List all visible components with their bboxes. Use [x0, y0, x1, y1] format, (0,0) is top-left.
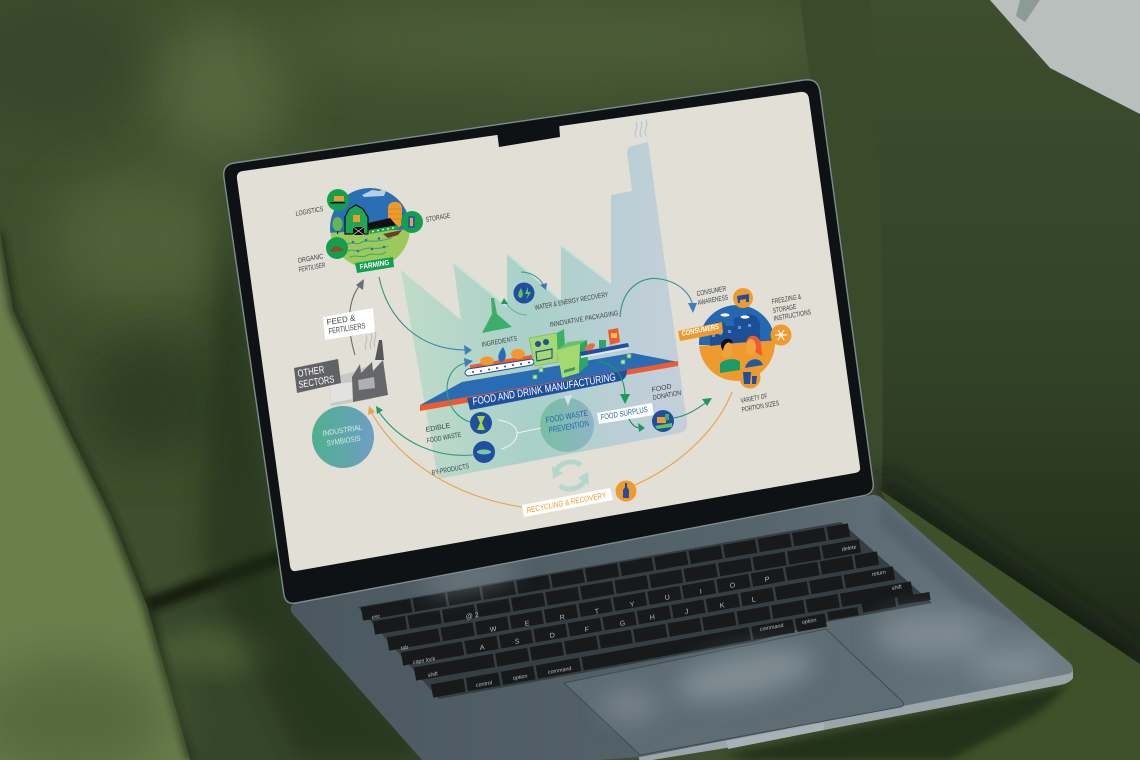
- key legends: esc: [372, 614, 381, 621]
- factory silhouette: [401, 120, 687, 478]
- consumers scene: [678, 288, 792, 388]
- laptop base: [291, 495, 1073, 760]
- chimney smoke: [635, 120, 647, 138]
- arrow: edible waste to ingredients: [447, 358, 473, 422]
- recycling icon: [552, 462, 589, 489]
- key legends: O: [730, 582, 736, 590]
- other sectors label: SECTORS: [298, 374, 335, 391]
- industrial symbiosis circle: SYMBIOSIS: [326, 434, 361, 448]
- key legends: U: [665, 594, 670, 602]
- consumer awareness label: CONSUMER: [696, 286, 727, 298]
- field waves: [347, 238, 392, 257]
- white connector arcs: [498, 420, 541, 449]
- logistics label: LOGISTICS: [295, 206, 324, 218]
- key legends: delete: [842, 544, 857, 553]
- icon: consumer awareness: [733, 288, 753, 308]
- arrow: factory to farming: [349, 279, 364, 355]
- food and drink manufacturing banner: FOOD AND DRINK MANUFACTURING: [472, 371, 616, 408]
- mud: [383, 230, 402, 238]
- cloud: [362, 190, 386, 197]
- key legends: tab: [401, 645, 409, 652]
- shed: [368, 218, 397, 231]
- edible food waste label: EDIBLE: [425, 422, 451, 434]
- feed and fertilisers label: FEED &: [326, 313, 356, 327]
- icon: bottle: [616, 480, 636, 502]
- key legends: shift: [428, 671, 439, 679]
- key legends: option: [802, 617, 817, 626]
- key legends: option: [513, 673, 528, 682]
- organic fertiliser label: FERTILISER: [298, 262, 326, 274]
- icon: logistics: [327, 189, 349, 211]
- arrow: farming to ingredients: [379, 277, 472, 355]
- icon: freezing: [770, 324, 792, 346]
- arrow: energy recovery: [501, 298, 527, 315]
- farming scene: [325, 184, 423, 275]
- icon: storage: [401, 211, 423, 233]
- sawtooth highlights: [453, 245, 611, 306]
- silo: [388, 202, 402, 228]
- woman: [745, 336, 763, 368]
- consumers label: CONSUMERS: [681, 322, 719, 338]
- industrial symbiosis circle: [312, 406, 374, 468]
- food waste prevention circle: PREVENTION: [548, 418, 589, 435]
- key legends: T: [595, 608, 600, 616]
- water and energy recovery label: WATER & ENERGY RECOVERY: [534, 291, 609, 312]
- base deck: [291, 495, 1073, 760]
- other sectors label: [294, 359, 341, 393]
- factory: other sectors: [329, 332, 388, 406]
- icon: food donation: [652, 410, 674, 432]
- barn: [345, 205, 368, 234]
- key legends: K: [720, 602, 725, 610]
- arrow: donation to consumers: [673, 398, 712, 418]
- farming label: FARMING: [359, 258, 390, 271]
- machine legs: [533, 354, 631, 379]
- edible food waste label: FOOD WASTE: [426, 432, 462, 445]
- light patches on deck: [419, 558, 1050, 721]
- icon: organic fertiliser: [326, 237, 348, 259]
- key legends: S: [515, 638, 520, 646]
- organic fertiliser label: ORGANIC: [297, 253, 324, 265]
- by-products label: BY-PRODUCTS: [431, 463, 470, 477]
- deck shadow: [882, 508, 1030, 628]
- arrow: surplus to donation: [629, 419, 645, 432]
- key legends: caps lock: [413, 656, 436, 666]
- machine one: [529, 329, 565, 366]
- freezing and storage label: INSTRUCTIONS: [773, 309, 812, 323]
- key legends: E: [525, 620, 530, 628]
- icon: portion sizes: [740, 368, 760, 388]
- food waste prevention circle: [540, 395, 594, 452]
- key legends: command: [760, 623, 784, 633]
- freezing and storage label: STORAGE: [772, 304, 797, 315]
- laptop shadow: [198, 222, 414, 760]
- food waste prevention circle: FOOD WASTE: [545, 408, 589, 425]
- arrow: by-products to symbiosis: [376, 406, 473, 455]
- key legends: A: [480, 644, 485, 652]
- key legends: P: [765, 576, 770, 584]
- trackpad: [564, 629, 904, 755]
- consumer awareness label: [696, 286, 729, 307]
- feed and fertilisers label: FERTILISERS: [328, 321, 366, 336]
- seat lower left: [158, 598, 288, 760]
- icon: edible food waste: [470, 412, 492, 434]
- key legends: Y: [630, 601, 635, 609]
- keyboard well: [358, 522, 932, 699]
- other sectors label: OTHER: [297, 365, 325, 380]
- camera notch: [498, 126, 560, 147]
- arrow: to food surplus: [598, 361, 630, 404]
- food donation label: FOOD: [651, 383, 672, 394]
- key legends: F: [585, 626, 590, 634]
- key legends: @ 2: [466, 612, 479, 621]
- key legends: shift: [892, 584, 903, 592]
- key legends: I: [700, 589, 702, 596]
- key legends: [372, 544, 903, 689]
- arrow: recycling to symbiosis: [368, 406, 522, 507]
- key legends: command: [548, 666, 572, 676]
- innovative packaging label: INNOVATIVE PACKAGING: [549, 310, 619, 329]
- key legends: L: [752, 596, 756, 604]
- arrow: water recovery: [521, 272, 547, 290]
- ingredients label: INGREDIENTS: [481, 335, 518, 349]
- arrow: consumers to recycling: [635, 392, 732, 485]
- recycling and recovery label: RECYCLING & RECOVERY: [526, 491, 607, 515]
- arrow: packaging to consumers: [620, 278, 697, 317]
- tree: [332, 217, 342, 234]
- base front edge: [638, 668, 1073, 760]
- variety of portion sizes label: PORTION SIZES: [741, 400, 780, 414]
- right wing of chair: [880, 201, 1140, 664]
- marble wall: [990, 0, 1140, 114]
- organic fertiliser label: [298, 254, 326, 272]
- man: [720, 339, 740, 373]
- key legends: control: [476, 680, 492, 689]
- front notch: [726, 723, 824, 749]
- key legends: D: [550, 632, 555, 640]
- manufacturing platform: [420, 353, 678, 411]
- food donation label: [651, 383, 682, 402]
- edible food waste label: [425, 422, 462, 445]
- key legends: H: [650, 614, 655, 622]
- left armrest: [0, 233, 190, 760]
- keyboard keys: [362, 530, 930, 691]
- conveyor right with packaging: [580, 328, 629, 358]
- food donation label: DONATION: [652, 390, 682, 402]
- key legends: G: [620, 620, 626, 628]
- key legends: J: [685, 608, 689, 616]
- machine two: [557, 340, 588, 378]
- freezing and storage label: FREEZING &: [771, 294, 802, 306]
- key legends: W: [490, 626, 497, 634]
- ingredients funnel: [482, 298, 512, 333]
- freezing and storage label: [771, 294, 812, 323]
- laptop lid bezel: [224, 80, 873, 603]
- icon: water and energy: [514, 282, 534, 304]
- consumer awareness label: AWARENESS: [697, 294, 729, 307]
- storage label: STORAGE: [425, 212, 451, 224]
- city skyline: [710, 314, 760, 346]
- industrial symbiosis circle: INDUSTRIAL: [322, 423, 363, 438]
- screen background: [237, 92, 860, 571]
- icon: by-products: [473, 441, 495, 463]
- food surplus label: FOOD SURPLUS: [600, 405, 648, 422]
- key legends: return: [872, 570, 886, 578]
- seat lower right: [880, 490, 1140, 680]
- variety of portion sizes label: [740, 393, 780, 414]
- conveyor left with food: [465, 347, 534, 376]
- feed and fertilisers label: [323, 308, 375, 340]
- key legends: R: [560, 614, 565, 622]
- variety of portion sizes label: VARIETY OF: [740, 393, 768, 405]
